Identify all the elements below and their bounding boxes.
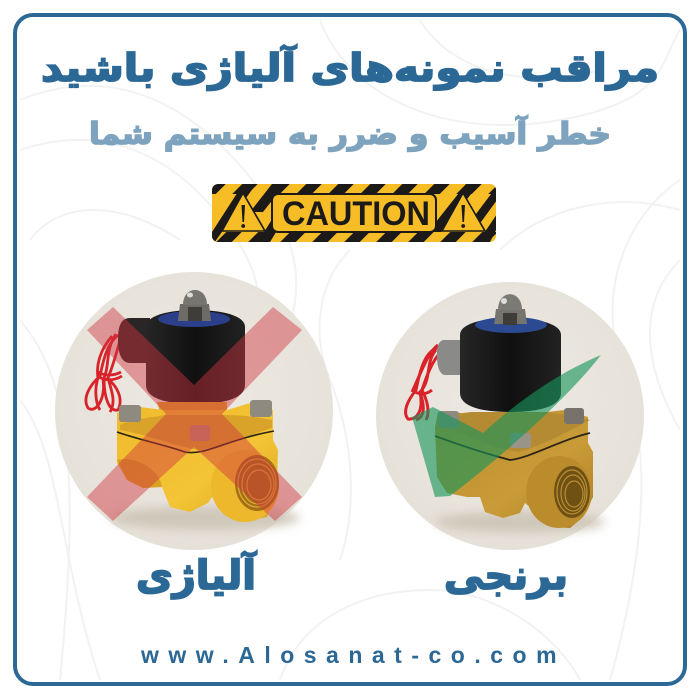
solenoid coil	[437, 294, 561, 412]
icon: red wires	[86, 334, 122, 412]
bolts	[119, 400, 272, 441]
icon: left warning triangle	[222, 193, 265, 231]
label: brass: برنجی	[444, 553, 568, 599]
label: alloy: آلیاژی	[136, 550, 257, 599]
panel: alloy valve with red cross	[55, 272, 333, 550]
icon: right warning triangle	[442, 193, 485, 231]
red cross mark	[87, 307, 302, 521]
subtitle: خطر آسیب و ضرر به سیستم شما	[89, 115, 611, 152]
valve body brass	[435, 408, 593, 528]
valve body yellow brass	[117, 400, 279, 522]
caution banner	[212, 184, 497, 246]
title: مراقب نمونه‌های آلیاژی باشید	[41, 44, 659, 90]
caution word: CAUTION	[282, 195, 430, 233]
icon: red wires	[406, 345, 442, 420]
panel: brass valve with green check	[376, 282, 644, 550]
green check mark	[412, 355, 601, 497]
bolts	[438, 408, 584, 448]
website address: www.Alosanat-co.com	[140, 642, 566, 668]
solenoid coil	[118, 290, 245, 404]
